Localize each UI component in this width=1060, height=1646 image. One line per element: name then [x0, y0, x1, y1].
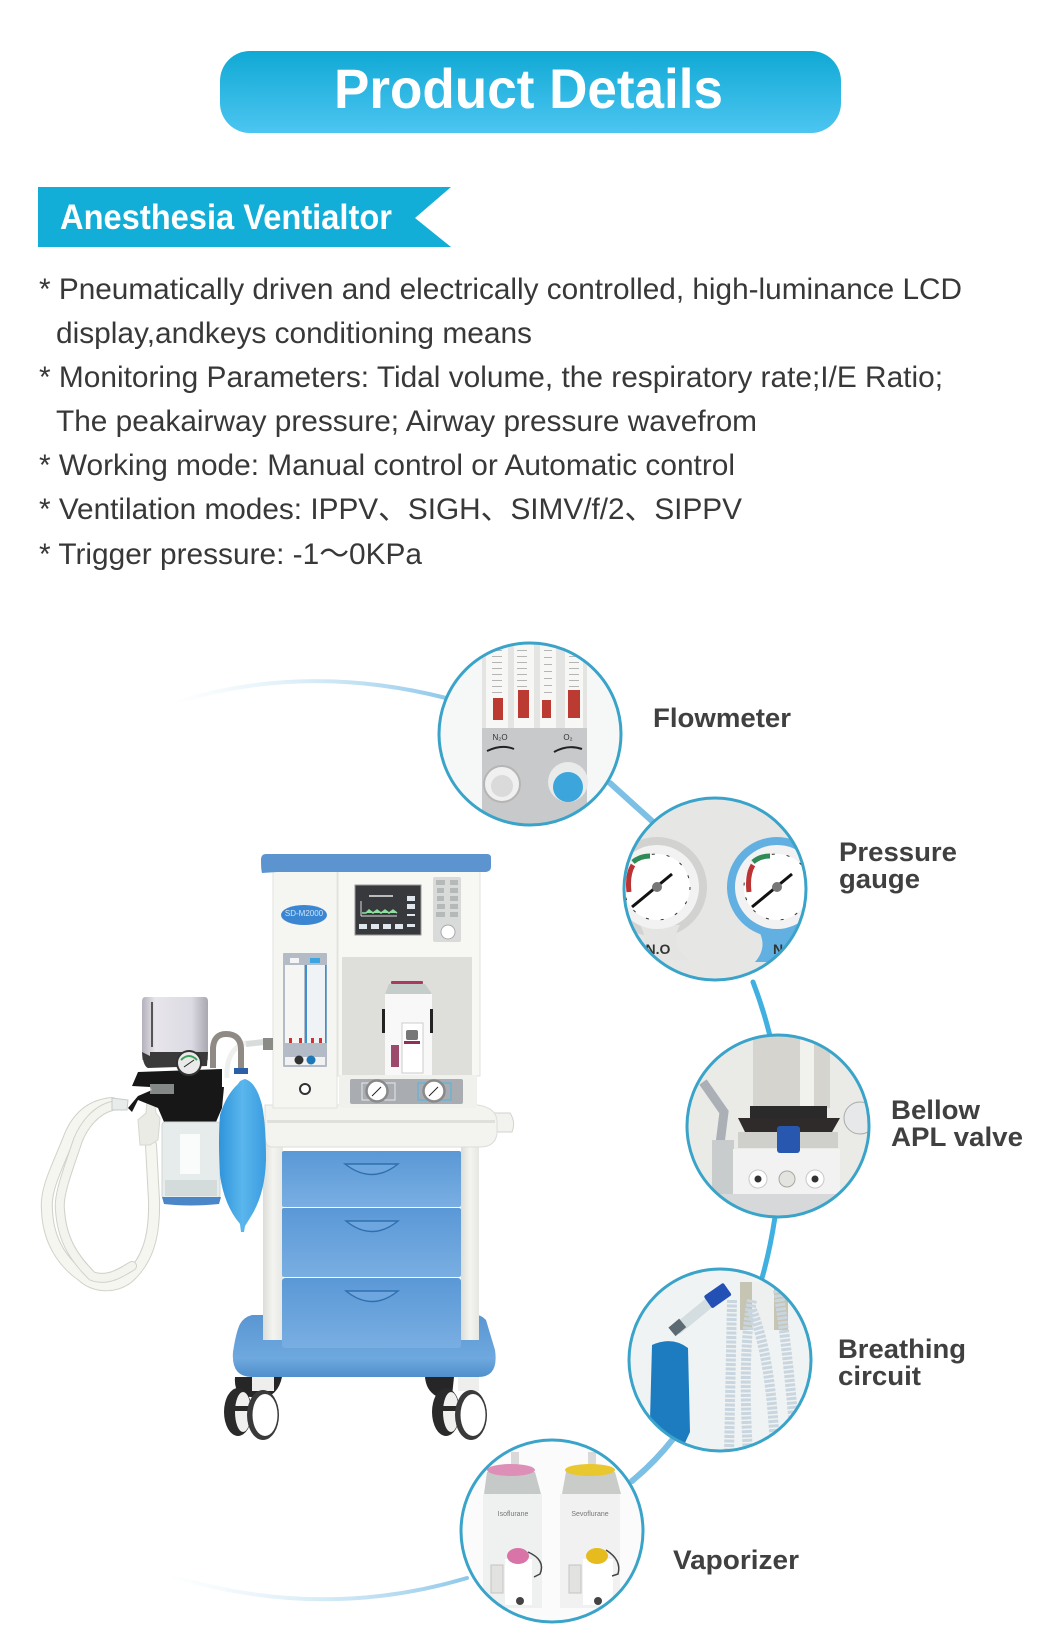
logo badge: [281, 905, 327, 925]
flowmeter panel: [283, 953, 327, 1067]
top cap: [261, 854, 491, 873]
detail circle: bellow APL valve: [684, 1033, 876, 1224]
feature list: [39, 273, 962, 571]
pressure gauge panel: [339, 1075, 477, 1108]
label: bellow APL valve: Bellow: [891, 1095, 980, 1125]
detail circle: flowmeter: O₂: [563, 733, 573, 742]
anesthesia machine: [47, 854, 514, 1440]
valve block: [128, 1051, 224, 1122]
detail circle: flowmeter: [438, 640, 622, 828]
keypad: [433, 877, 461, 942]
label: breathing circuit: circuit: [838, 1361, 921, 1391]
feature list: * Working mode: Manual control or Automatic control: [39, 449, 735, 482]
lower canister: [162, 1122, 221, 1206]
label: vaporizer: Vaporizer: [673, 1545, 799, 1575]
title pill: [220, 51, 841, 133]
logo badge: SD-M2000: [285, 909, 324, 918]
detail circle: vaporizer: [458, 1438, 646, 1626]
table top: [265, 1105, 497, 1147]
connector arcs: [168, 681, 775, 1599]
front wheels: [224, 1377, 487, 1440]
detail circle: breathing circuit: [628, 1268, 814, 1455]
base: [233, 1315, 496, 1377]
label: pressure gauge: gauge: [839, 864, 920, 894]
feature list: * Monitoring Parameters: Tidal volume, the respiratory rate;I/E Ratio;: [39, 361, 943, 394]
detail circle: pressure gauges: [622, 796, 808, 982]
upper body: [273, 871, 480, 1108]
label: breathing circuit: [838, 1334, 966, 1391]
LCD screen: [355, 885, 421, 935]
label: pressure gauge: Pressure: [839, 837, 957, 867]
bellows jar: [142, 997, 208, 1068]
feature list: * Ventilation modes: IPPV、SIGH、SIMV/f/2、SIPPV: [39, 493, 742, 526]
feature list: * Trigger pressure: -1～0KPa: [39, 538, 422, 571]
label: flowmeter: Flowmeter: [653, 703, 791, 733]
feature list: display,andkeys conditioning means: [56, 317, 532, 350]
label: bellow APL valve: APL valve: [891, 1122, 1023, 1152]
vaporizer recess: [342, 957, 472, 1075]
metal pipe: [213, 1034, 273, 1078]
power button: [300, 1084, 310, 1094]
detail circle: pressure gauges: N: [773, 941, 783, 957]
feature list: * Pneumatically driven and electrically controlled, high-luminance LCD: [39, 273, 962, 306]
breathing bag: [219, 1079, 266, 1232]
tray tab: [495, 1113, 514, 1132]
section banner: [38, 187, 451, 247]
detail circle: vaporizer: Isoflurane: [498, 1511, 528, 1518]
label: pressure gauge: [839, 837, 957, 894]
title pill: Product Details: [334, 57, 723, 120]
rear wheels: [235, 1377, 454, 1398]
detail circle: vaporizer: Sevoflurane: [571, 1511, 609, 1518]
section banner: Anesthesia Ventialtor: [60, 198, 392, 237]
drawers: [282, 1151, 461, 1348]
label: breathing circuit: Breathing: [838, 1334, 966, 1364]
trolley column: [263, 1144, 479, 1340]
label: bellow APL valve: [891, 1095, 1023, 1152]
detail circle: flowmeter: N₂O: [492, 733, 508, 742]
breathing hose: [47, 1098, 160, 1285]
feature list: The peakairway pressure; Airway pressure wavefrom: [56, 405, 757, 438]
detail circle: pressure gauges: N.O: [646, 941, 671, 957]
